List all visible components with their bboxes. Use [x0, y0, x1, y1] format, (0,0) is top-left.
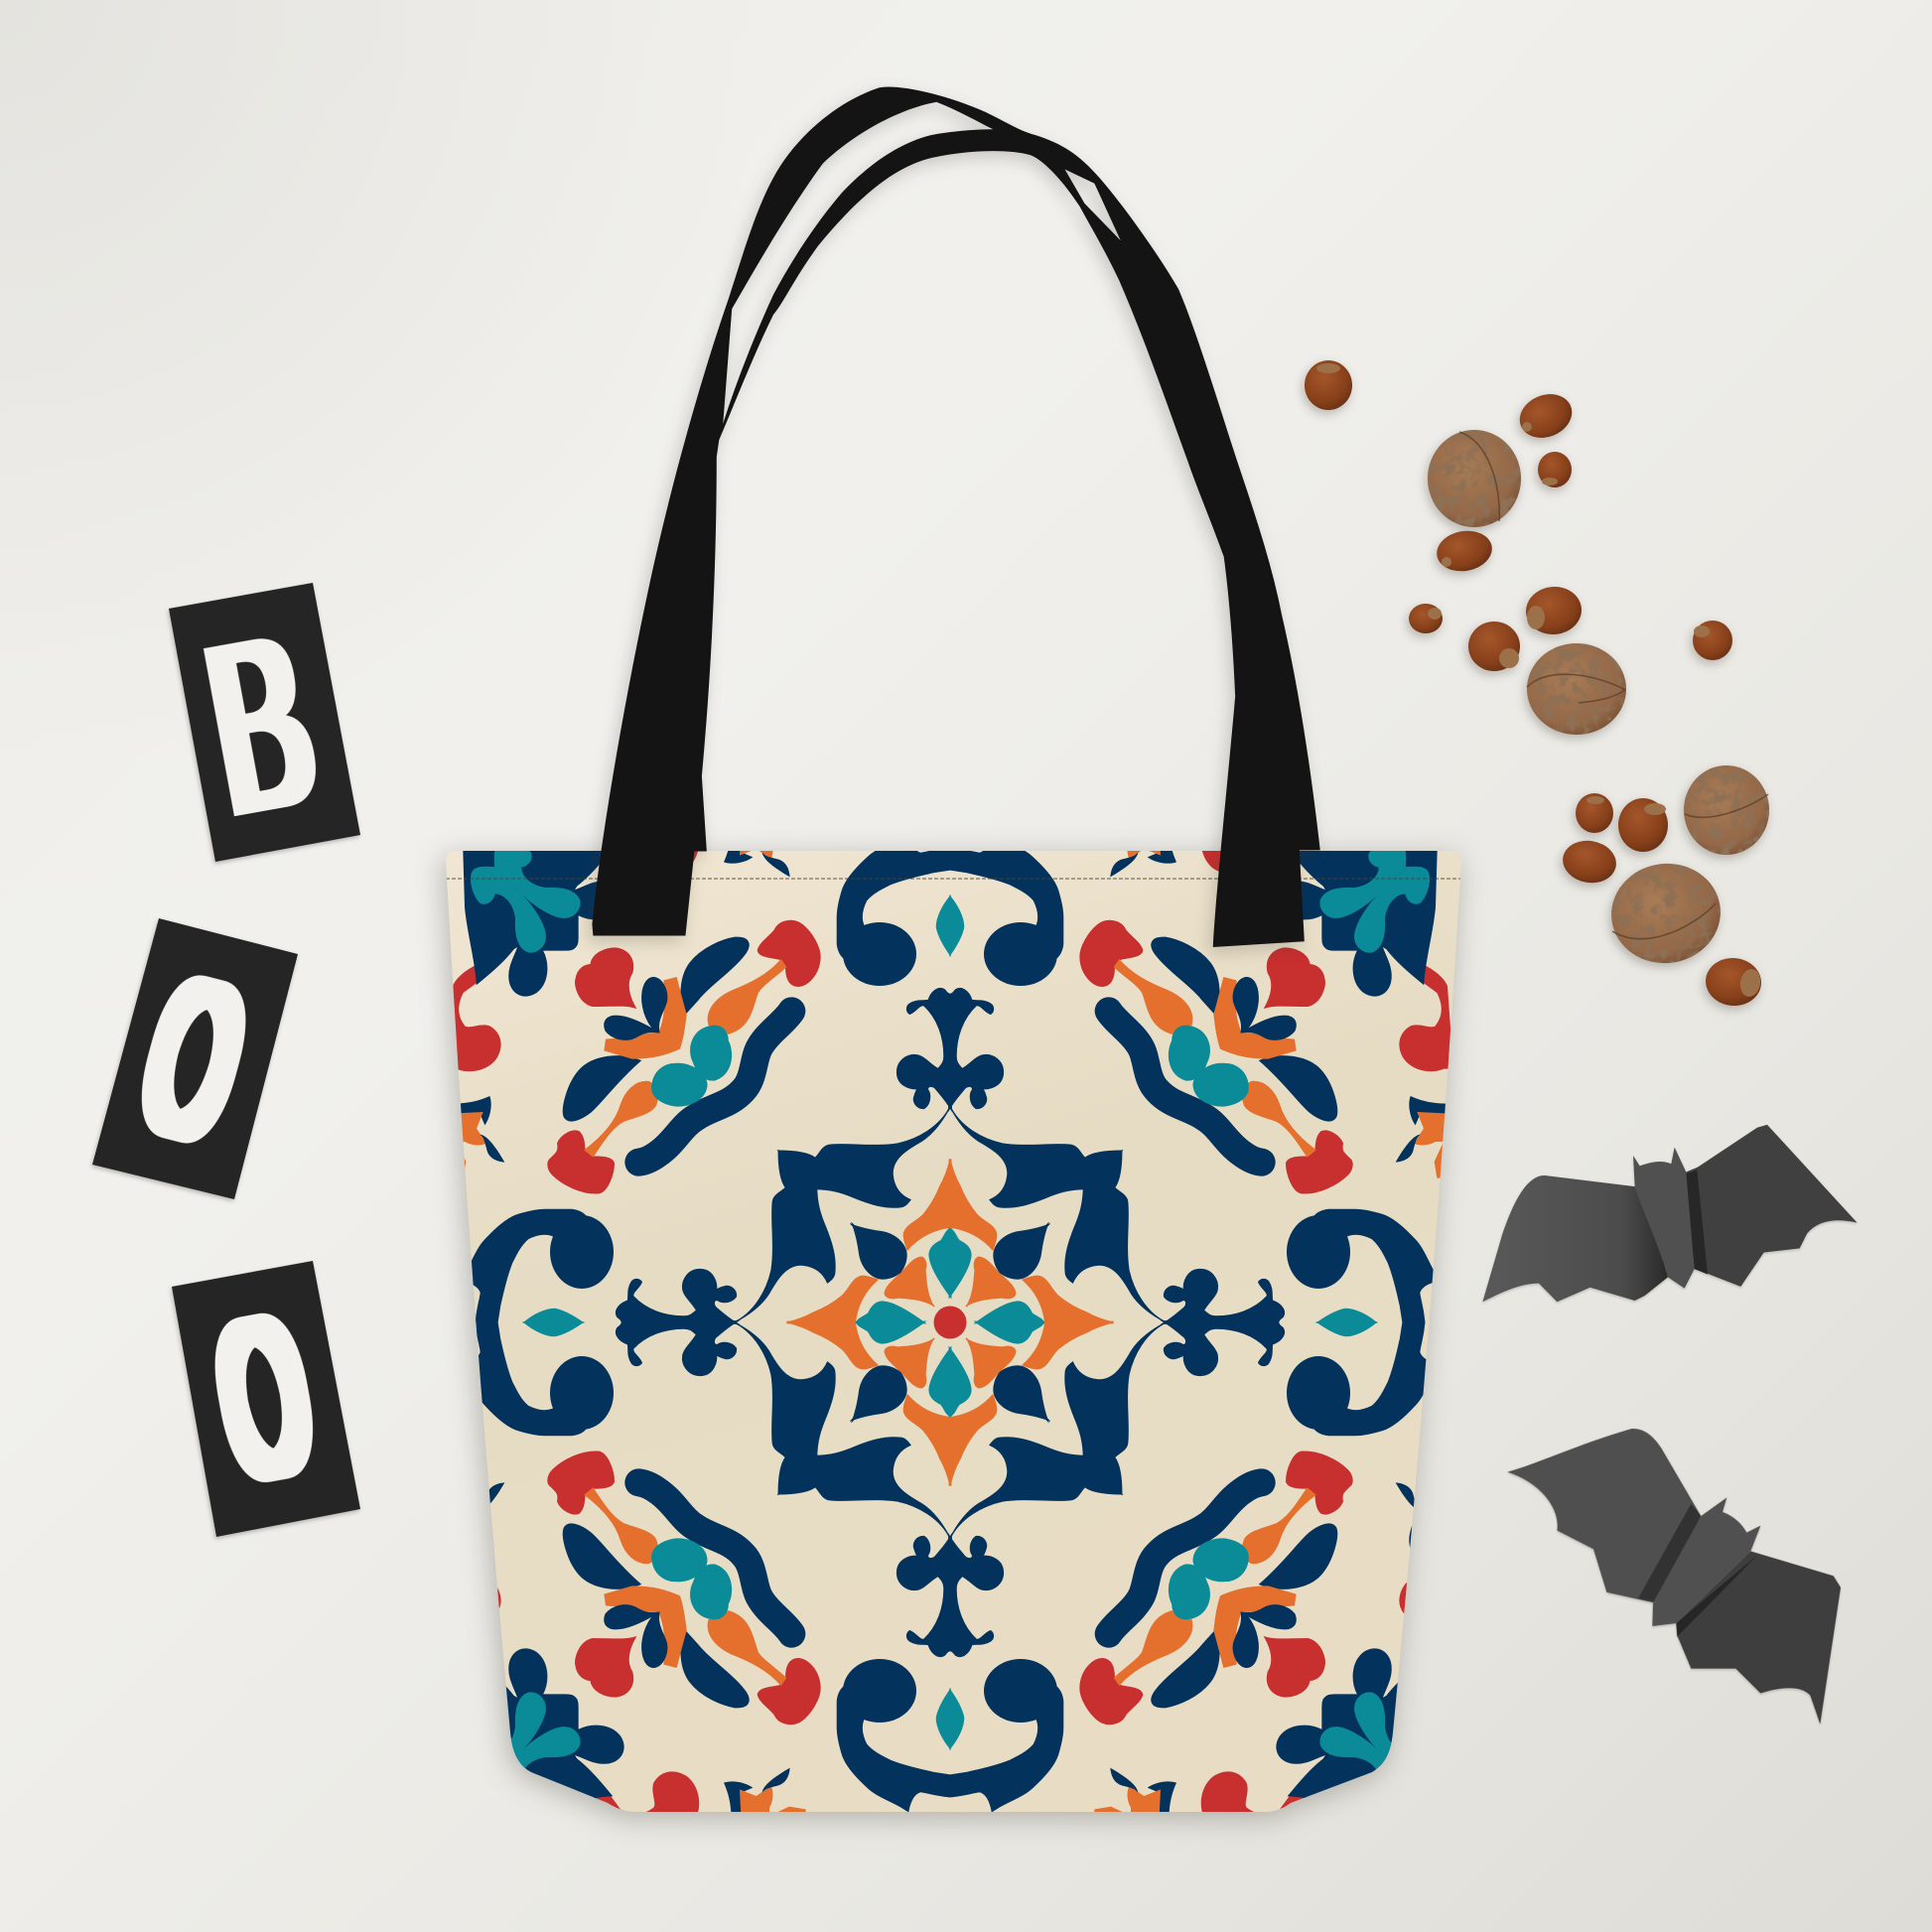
hazelnut caps — [1316, 363, 1762, 999]
bat fold shadow — [1685, 1170, 1708, 1274]
bat body and ears — [1633, 1148, 1695, 1289]
card: B: B — [192, 583, 331, 868]
bat lower fold shadow — [1676, 1555, 1757, 1637]
tote bag — [427, 87, 1479, 1826]
card: O: O — [203, 1270, 326, 1525]
bat body and ears — [1652, 1497, 1760, 1626]
scattered nuts — [1305, 360, 1769, 1008]
bat lower wing — [1676, 1551, 1841, 1725]
bat upper wing — [1507, 1429, 1701, 1602]
cream canvas — [427, 844, 1479, 1822]
card: O — [92, 918, 298, 1199]
tile edge fragments — [447, 819, 1453, 1826]
card: O — [172, 1261, 360, 1537]
central medallion — [617, 989, 1284, 1656]
bat outline and left wing — [1482, 1175, 1668, 1302]
diagonal floral motifs — [548, 921, 1352, 1724]
BOO letter cards — [92, 583, 360, 1537]
walnut seams — [1459, 432, 1768, 939]
paper bat, lower — [1507, 1429, 1841, 1725]
bag body with ornamental pattern — [427, 819, 1479, 1826]
corner navy and teal motifs — [457, 829, 1444, 1816]
bat wing fold shadow — [1638, 1504, 1701, 1602]
hem stitching — [446, 878, 1461, 880]
hazelnuts — [1305, 360, 1763, 1008]
side scroll brackets with teal leaves — [461, 833, 1440, 1812]
card: O: O — [122, 931, 265, 1187]
bat right wing — [1686, 1125, 1858, 1287]
walnuts — [1428, 430, 1769, 970]
black handles — [592, 87, 1320, 947]
paper bat, upper — [1482, 1125, 1858, 1302]
